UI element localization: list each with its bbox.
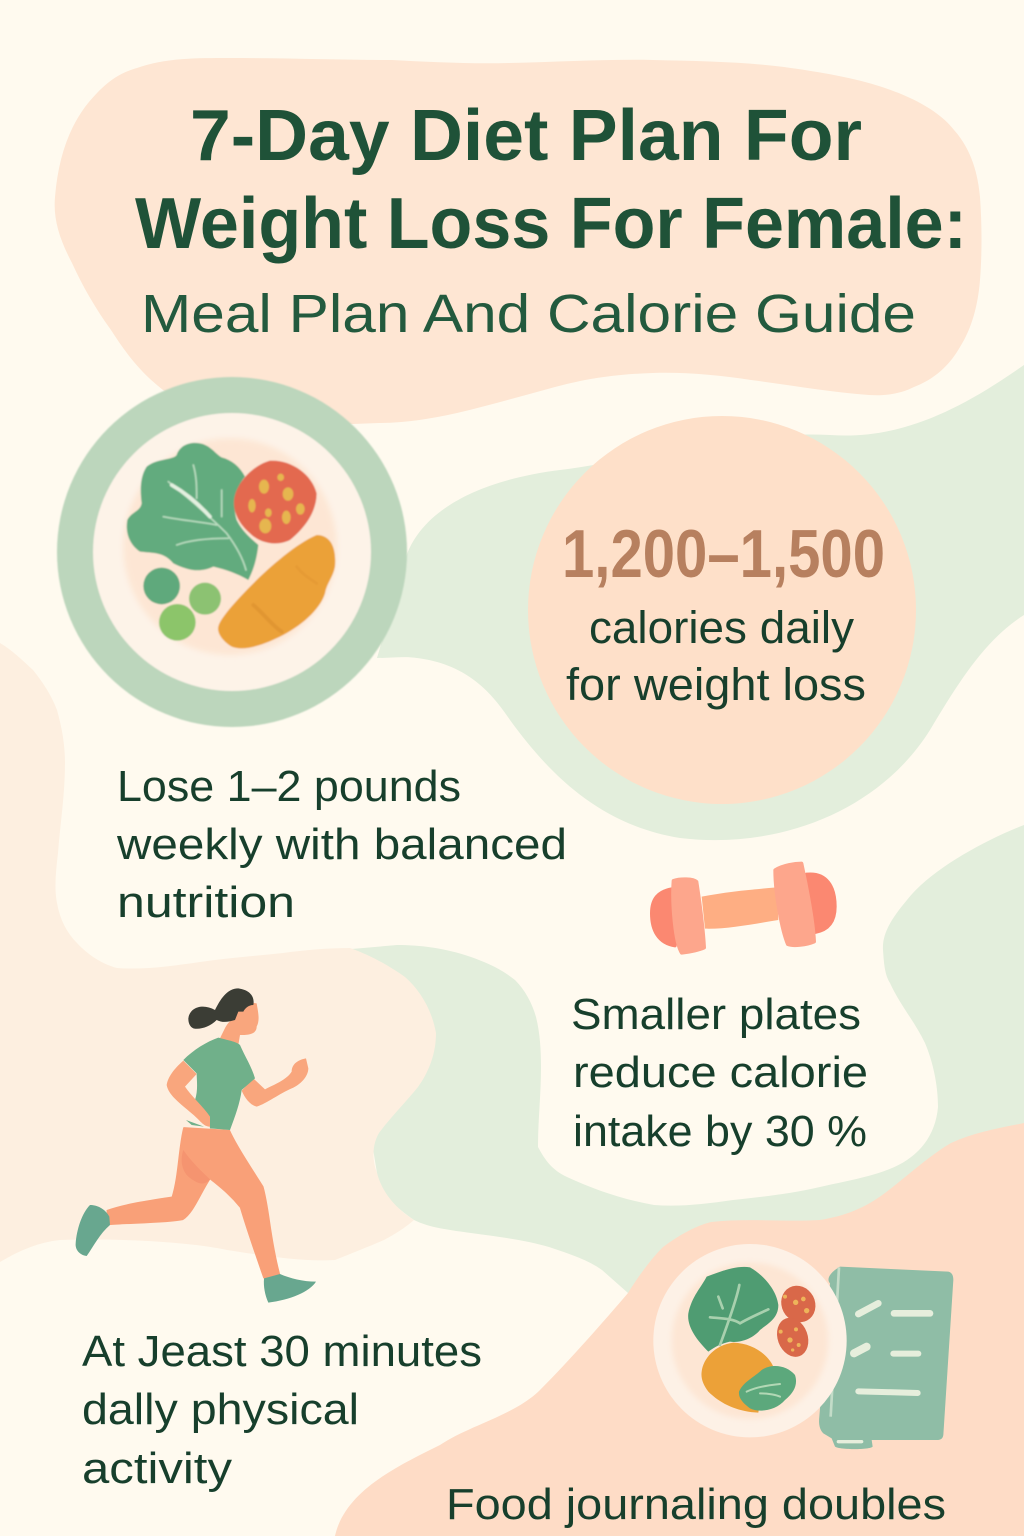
icon: peas xyxy=(143,568,221,641)
icon: small greens xyxy=(739,1366,796,1411)
title xyxy=(135,96,967,264)
text: weekly weight loss xyxy=(116,762,567,927)
text: daily physical activity xyxy=(82,1327,482,1493)
calorie circle: 1,200–1,500 xyxy=(562,516,885,592)
text: weekly weight loss: Lose 1–2 pounds xyxy=(117,762,461,811)
icon: baked chicken xyxy=(218,535,335,648)
text: smaller plates: reduce calorie xyxy=(573,1048,868,1097)
title: 7-Day Diet Plan For xyxy=(190,96,862,176)
calorie circle: for weight loss xyxy=(566,659,866,710)
icon: food journal xyxy=(819,1267,953,1449)
background blob: lower green wave xyxy=(340,825,1024,1300)
background blob: upper green wave xyxy=(377,365,1024,840)
text: food journaling: Food journaling doubles xyxy=(446,1480,946,1529)
title blob xyxy=(55,58,982,425)
text: weekly weight loss: nutrition xyxy=(117,878,295,927)
icon: running woman xyxy=(76,988,316,1303)
text: smaller plates: Smaller plates xyxy=(571,990,861,1039)
calorie circle: calories daily xyxy=(589,602,854,653)
icon: tomato slice xyxy=(234,461,317,543)
text: daily physical activity: activity xyxy=(82,1444,232,1493)
subtitle: Meal Plan And Calorie Guide xyxy=(141,284,916,344)
calorie circle xyxy=(528,416,916,804)
background blob: left peach wave xyxy=(0,643,436,1262)
icon: small squash xyxy=(701,1343,773,1413)
icon: small meal plate xyxy=(653,1244,847,1437)
text: weekly weight loss: weekly with balanced xyxy=(116,820,567,869)
icon: healthy plate xyxy=(57,377,407,727)
icon: lettuce leaf xyxy=(127,443,258,580)
background blob: bottom right peach wave xyxy=(335,1123,1024,1536)
text: smaller plates: intake by 30 % xyxy=(573,1107,867,1156)
icon: dumbbell xyxy=(652,863,835,953)
text: daily physical activity: At Jeast 30 minutes xyxy=(82,1327,482,1376)
text: daily physical activity: dally physical xyxy=(82,1385,359,1434)
icon: small tomatoes xyxy=(772,1280,822,1361)
title: Weight Loss For Female: xyxy=(135,184,967,264)
text: smaller plates xyxy=(571,990,868,1156)
icon: small leaf xyxy=(688,1267,778,1352)
